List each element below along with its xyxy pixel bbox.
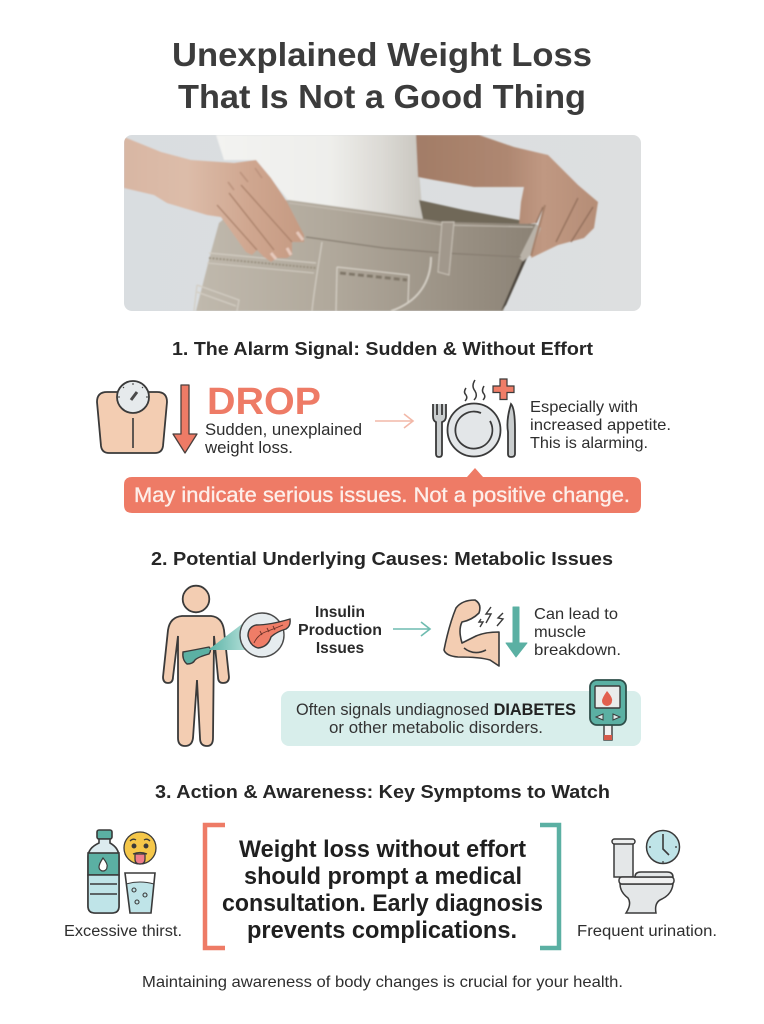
callout: diabetes box [281,691,641,746]
callout: diabetes box: Often signals undiagnosed DIABETES [296,701,576,719]
title: Unexplained Weight Loss [172,36,592,73]
text: insulin production issues: Issues [316,640,364,657]
text: muscle breakdown [534,606,621,659]
title [172,36,592,115]
photo: hands pulling oversized trousers waistband [124,135,641,311]
text: drop [204,381,362,457]
icon: wall clock [646,830,680,864]
title: That Is Not a Good Thing [178,78,586,115]
icon: teal down arrow [506,607,527,657]
icon: bathroom scale [97,381,167,453]
icon: human body with highlighted pancreas [163,586,290,746]
callout: medical consultation message: consultation. Early diagnosis [222,890,543,917]
callout: serious issues banner [124,468,641,513]
icon: glass of water [125,873,155,913]
footer note: Maintaining awareness of body changes is crucial for your health. [142,974,623,991]
text: increased appetite: This is alarming. [530,435,648,452]
text: muscle breakdown: muscle [534,624,586,641]
text: insulin production issues: Production [298,622,382,639]
heading: section 3: 3. Action & Awareness: Key Symptoms to Watch [155,781,610,802]
icon: toilet [612,839,674,913]
icon: plate with fork, knife, steam and medical cross [433,379,515,457]
text: drop: DROP [207,381,321,423]
text: insulin production issues: Insulin [315,604,365,621]
text: muscle breakdown: Can lead to [534,606,618,623]
text: increased appetite: Especially with [530,399,638,416]
callout: diabetes box: or other metabolic disorders. [329,719,543,737]
text: increased appetite: increased appetite. [530,417,671,434]
icon: flexed muscle arm [444,600,503,666]
callout: medical consultation message: Weight loss without effort [239,836,526,863]
heading: section 2: 2. Potential Underlying Causes: Metabolic Issues [151,548,613,569]
left bracket [205,825,225,948]
icon: water bottle [88,830,119,913]
callout: medical consultation message [222,836,543,944]
icon: thirsty face emoji [124,832,156,864]
callout: medical consultation message: should prompt a medical [244,863,522,890]
text: insulin production issues [298,604,382,657]
icon: glucose meter [590,680,626,740]
text: drop: Sudden, unexplained [205,421,362,439]
text: muscle breakdown: breakdown. [534,642,621,659]
icon: red down arrow [173,385,197,453]
callout: serious issues banner: May indicate serious issues. Not a positive change. [134,484,630,507]
arrow: insulin to muscle [393,622,430,636]
heading: section 1: 1. The Alarm Signal: Sudden & Without Effort [172,338,593,359]
label: frequent urination: Frequent urination. [577,923,717,940]
callout: medical consultation message: prevents complications. [247,917,517,944]
arrow: drop to appetite [375,414,413,428]
text: increased appetite [530,399,671,452]
label: excessive thirst: Excessive thirst. [64,923,182,940]
right bracket [540,825,559,948]
text: drop: weight loss. [204,439,293,457]
